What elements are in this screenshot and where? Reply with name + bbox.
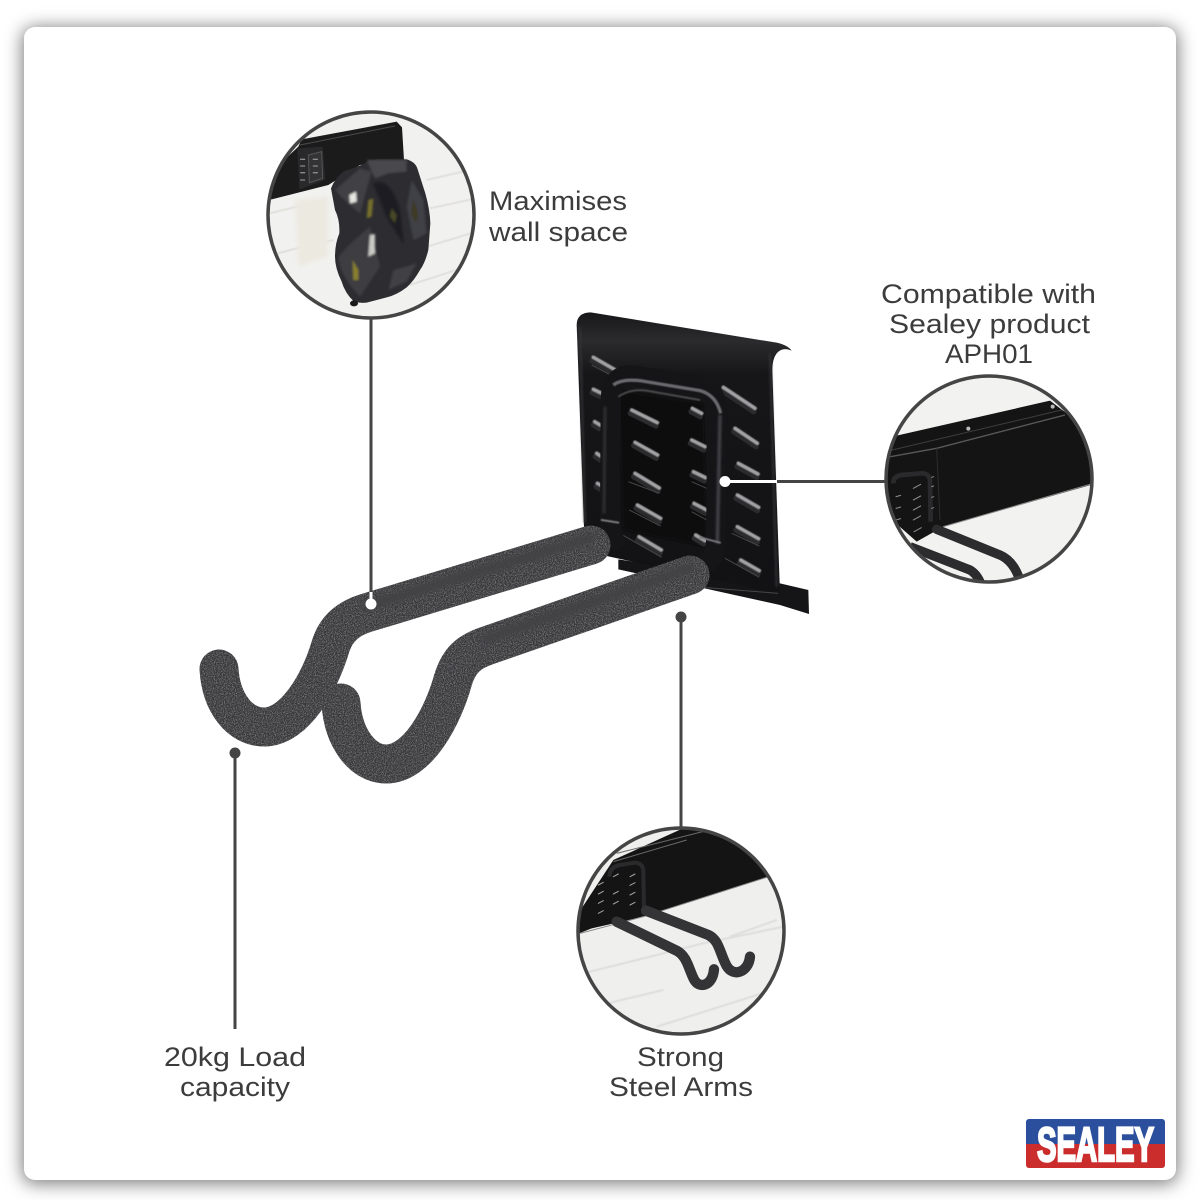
circle photo: helmet on hook: [260, 105, 480, 325]
label: compatible with APH01: APH01: [945, 339, 1033, 369]
label: compatible with APH01: [881, 279, 1096, 369]
bracket loop: [610, 375, 717, 563]
label: maximises wall space: Maximises: [489, 186, 627, 216]
label: strong steel arms: Strong: [637, 1042, 724, 1072]
back plate: [577, 312, 792, 594]
leader line: compatibility: [720, 476, 886, 487]
circle photo: wall rail: [880, 370, 1100, 590]
pressed slats: [592, 361, 758, 574]
label: strong steel arms: [609, 1042, 753, 1102]
foam arm: left: [219, 538, 591, 727]
leader line: steel arms: [676, 612, 686, 828]
label: compatible with APH01: Sealey product: [889, 309, 1091, 339]
bracket: [609, 863, 644, 908]
bracket: [893, 473, 931, 522]
circle photo: steel arms: [570, 820, 790, 1040]
leader line: wall space: [366, 318, 376, 610]
lower mounting flange: [618, 559, 809, 614]
hook arms: [937, 529, 1021, 583]
infographic canvas: [166, 110, 1165, 1168]
label: maximises wall space: wall space: [488, 217, 628, 247]
label: load capacity: [164, 1042, 306, 1102]
foam arm: right: [341, 568, 690, 764]
label: maximises wall space: [488, 186, 628, 247]
label: compatible with APH01: Compatible with: [881, 279, 1096, 309]
product photo: wall hook: [219, 312, 809, 764]
label: strong steel arms: Steel Arms: [609, 1072, 753, 1102]
label: load capacity: 20kg Load: [164, 1042, 306, 1072]
helmet: [331, 159, 430, 303]
label: load capacity: capacity: [180, 1072, 291, 1102]
loop interior shadow: [618, 390, 707, 547]
hook arms: [617, 922, 714, 985]
leader line: load capacity: [230, 748, 240, 1029]
